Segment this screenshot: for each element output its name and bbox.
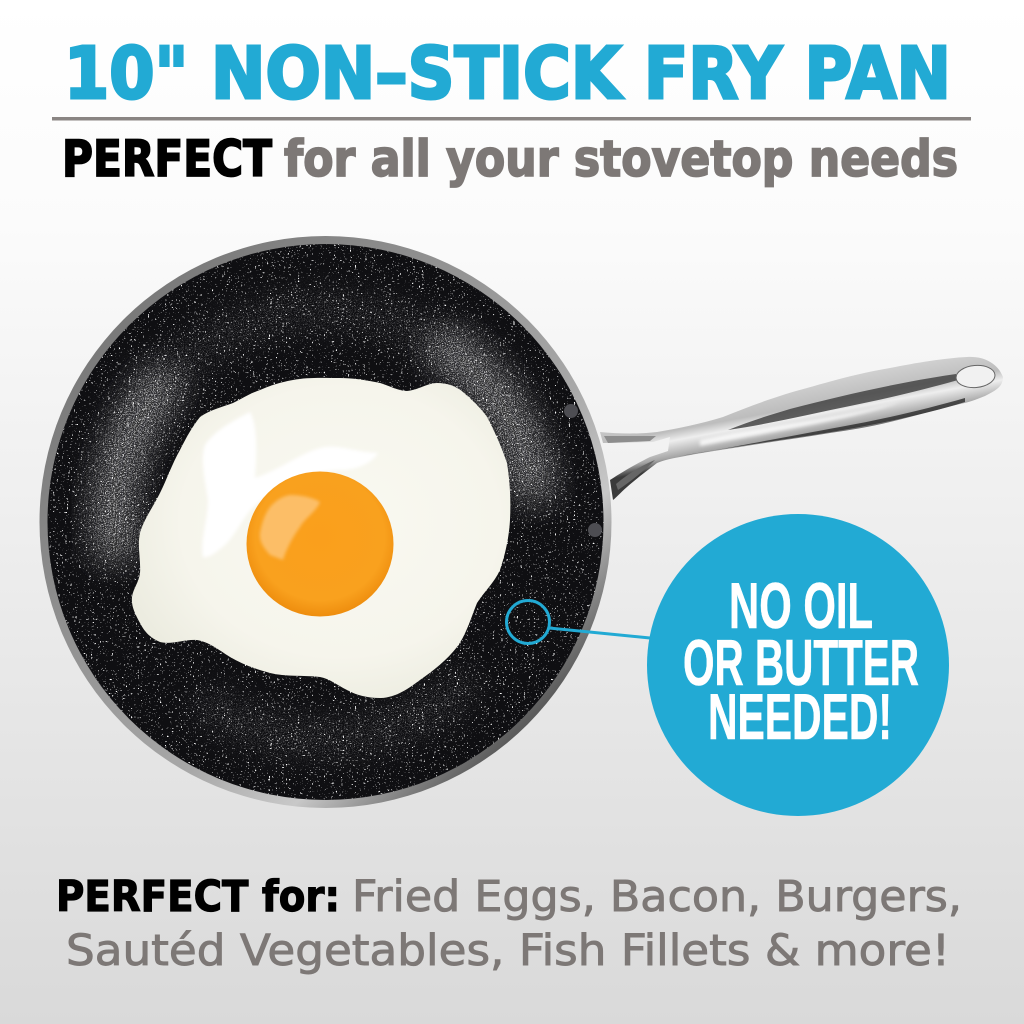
icon: yolk highlight	[260, 495, 320, 560]
footer text: Sautéd Vegetables, Fish Fillets & more!	[66, 926, 950, 976]
footer text: PERFECT for:	[56, 872, 340, 922]
callout: no oil or butter needed	[506, 514, 949, 816]
callout circle	[647, 514, 949, 816]
handle dark groove	[728, 374, 958, 430]
icon: egg glossy folds	[202, 412, 378, 557]
callout connector line	[549, 628, 650, 638]
handle bright highlight	[700, 402, 900, 446]
callout text: NO OIL	[729, 569, 873, 642]
handle lower dark edge	[680, 398, 965, 456]
icon: pan handle	[600, 357, 1003, 500]
title: 10" NON–STICK FRY PAN	[64, 32, 951, 115]
icon: egg white	[132, 378, 510, 698]
icon: egg yolk	[246, 472, 394, 616]
subtitle: PERFECT	[62, 130, 272, 188]
icon: fry pan	[40, 236, 612, 808]
callout text: NEEDED!	[708, 680, 892, 753]
callout ring on pan	[506, 600, 550, 644]
footer text	[56, 872, 962, 976]
handle eyelet	[955, 364, 996, 389]
callout text	[683, 569, 919, 753]
footer text: Fried Eggs, Bacon, Burgers,	[352, 872, 962, 922]
pan glow bands	[114, 340, 535, 560]
